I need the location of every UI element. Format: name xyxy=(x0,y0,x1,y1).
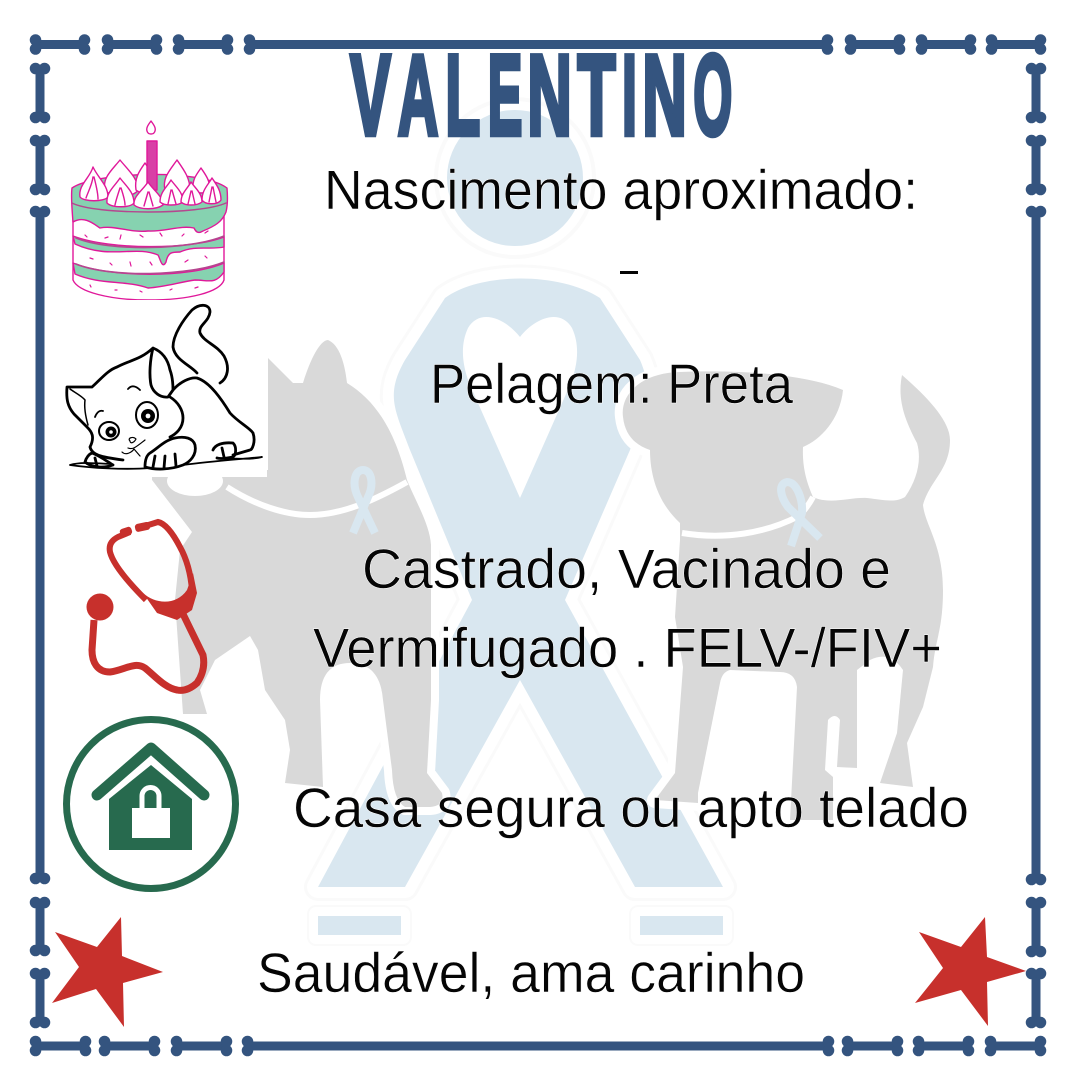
icon: red star left xyxy=(52,917,163,1027)
title: I xyxy=(622,32,637,159)
title: T xyxy=(578,32,616,159)
background: awareness ribbon figure xyxy=(308,110,733,945)
title: A xyxy=(398,32,438,159)
icon: stethoscope xyxy=(86,521,204,690)
text: coat colour: Pelagem: Preta xyxy=(430,352,794,415)
title: N xyxy=(527,32,572,159)
icon: kitten line drawing xyxy=(60,300,267,477)
text: O xyxy=(693,32,732,159)
background: dog silhouette xyxy=(623,371,950,820)
background: cat silhouette xyxy=(152,340,442,807)
text: health status line 1: Castrado, Vacinado e xyxy=(362,537,891,600)
title: N xyxy=(642,32,687,159)
title: L xyxy=(445,32,480,159)
title: V xyxy=(350,32,391,159)
title: E xyxy=(488,32,522,159)
icon: green house with padlock xyxy=(66,720,236,888)
text: health status line 2: Vermifugado . FELV-/FIV+ xyxy=(313,616,942,679)
small ribbon on dog collar xyxy=(781,482,820,546)
icon: red star right xyxy=(915,917,1026,1026)
text: temperament: Saudável, ama carinho xyxy=(257,941,805,1004)
title xyxy=(350,32,732,159)
text: housing requirement: Casa segura ou apto telado xyxy=(293,776,969,839)
small ribbon on cat collar xyxy=(353,470,375,533)
text: birth date value xyxy=(620,271,638,274)
icon: birthday cake xyxy=(72,121,227,300)
text: birth date label: Nascimento aproximado: xyxy=(324,158,918,221)
